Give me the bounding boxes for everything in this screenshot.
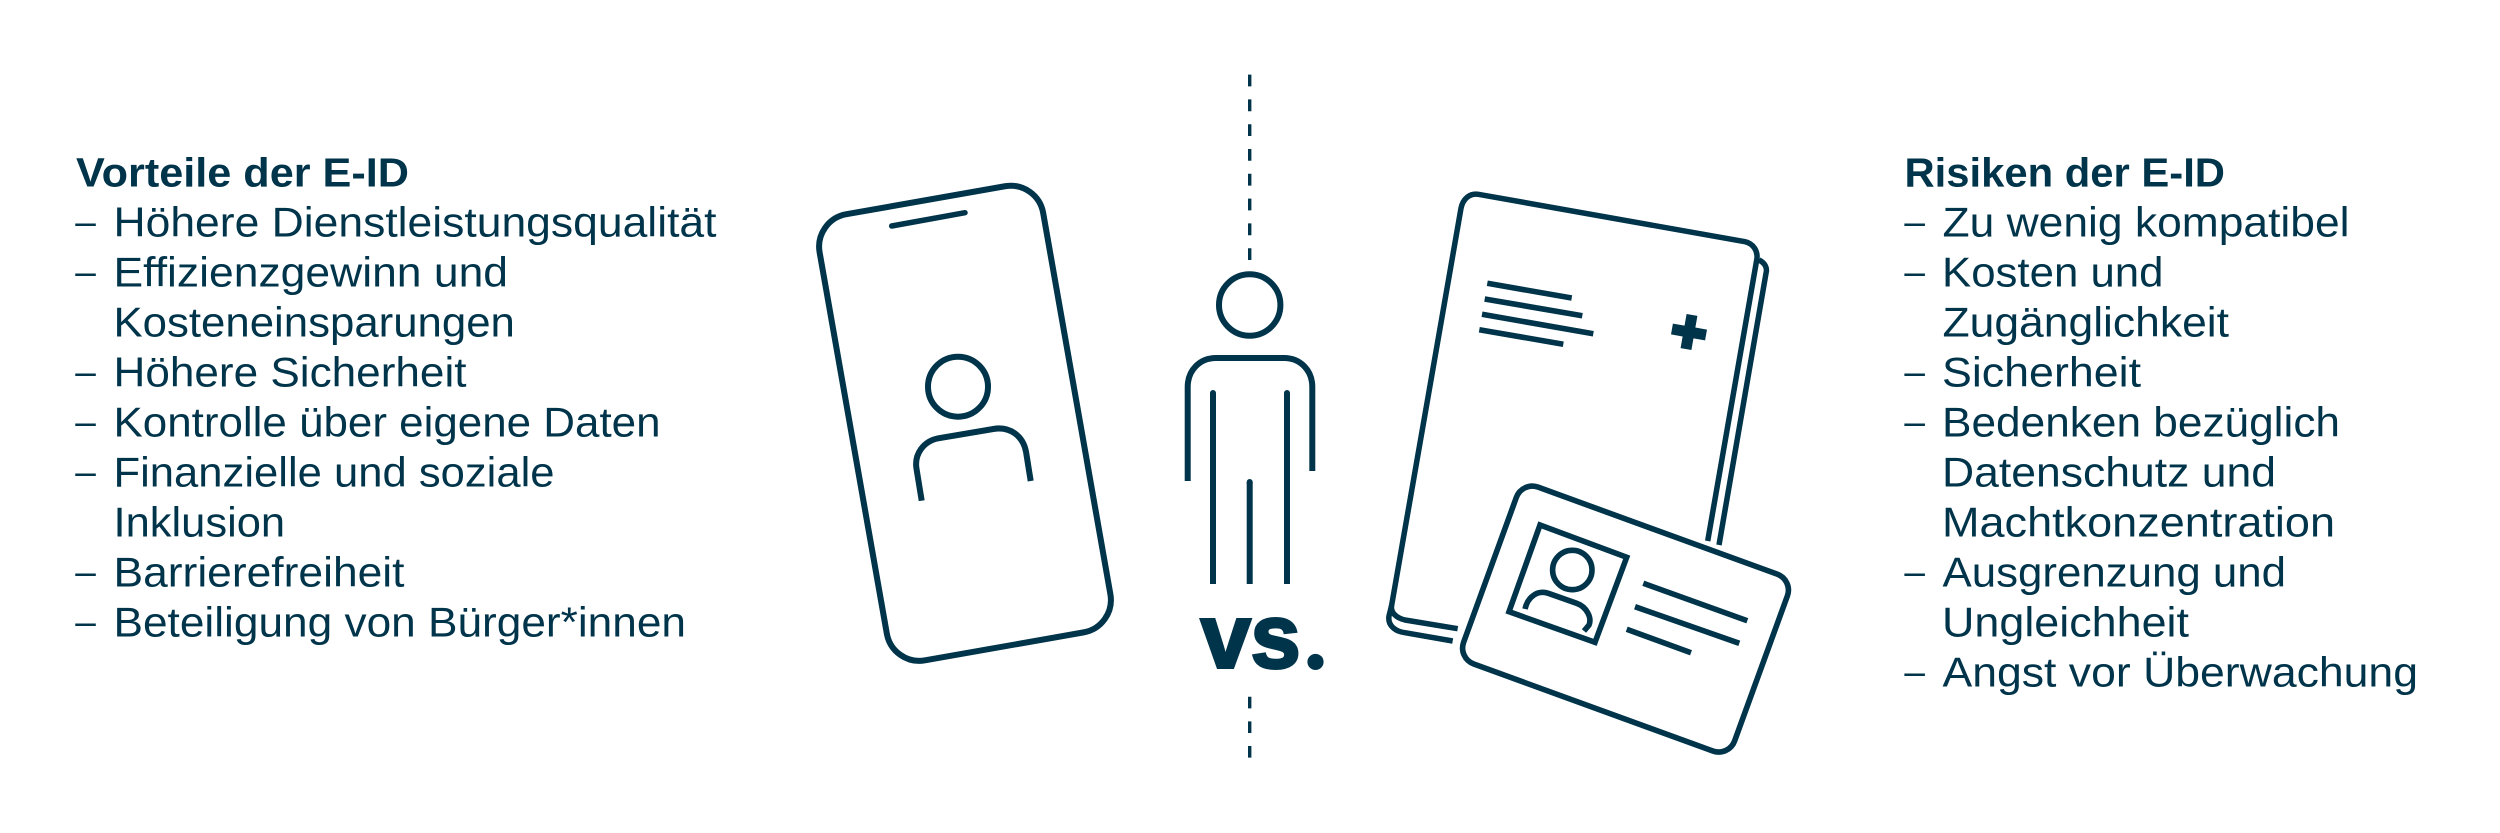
- list: Risiken: Zugänglichkeit: [1942, 299, 2229, 346]
- list: Vorteile: Barrierefreiheit: [114, 549, 405, 596]
- list: Vorteile: Höhere Dienstleistungsqualität: [114, 199, 717, 246]
- icon: person: [1188, 274, 1312, 584]
- booklet back cover: [1389, 260, 1766, 641]
- divider: dashed line top: [1248, 75, 1251, 261]
- list: Risiken: Ausgrenzung und: [1942, 549, 2286, 596]
- label: vs.: vs: [1201, 587, 1301, 688]
- list: Vorteile: –: [75, 251, 96, 292]
- list: Vorteile: Effizienzgewinn und: [114, 249, 508, 296]
- list: Vorteile: Höhere Sicherheit: [114, 349, 467, 396]
- list: Vorteile: –: [75, 351, 96, 392]
- list: Risiken: Sicherheit: [1942, 349, 2141, 396]
- icon: health insurance booklet: [1389, 194, 1766, 641]
- list: Vorteile: Finanzielle und soziale: [114, 449, 554, 496]
- list: Risiken: Ungleichheit: [1942, 599, 2189, 646]
- booklet cross: [1669, 312, 1709, 352]
- booklet front cover: [1391, 194, 1757, 629]
- list: Vorteile: –: [75, 601, 96, 642]
- list: Vorteile: Kontrolle über eigene Daten: [114, 399, 660, 446]
- list: Risiken: Angst vor Überwachung: [1942, 649, 2418, 696]
- panel: Risiken der E-ID: [1904, 150, 2418, 696]
- card text lines: [1627, 583, 1747, 653]
- list: Vorteile: Beteiligung von Bürger*innen: [114, 599, 686, 646]
- list: Risiken: –: [1904, 351, 1925, 392]
- card photo frame: [1509, 525, 1627, 642]
- list: Vorteile: Kosteneinsparungen: [114, 299, 515, 346]
- booklet text lines: [1479, 283, 1593, 344]
- list: Risiken: [1904, 199, 2418, 696]
- list: Risiken: –: [1904, 401, 1925, 442]
- card portrait: [1525, 550, 1592, 631]
- list: Risiken: –: [1904, 251, 1925, 292]
- icon: smartphone with user: [814, 181, 1116, 666]
- list: Risiken: Kosten und: [1942, 249, 2164, 296]
- list: Risiken: –: [1904, 651, 1925, 692]
- list: Risiken: –: [1904, 201, 1925, 242]
- list: Vorteile: –: [75, 451, 96, 492]
- label: vs.: .: [1303, 580, 1328, 690]
- heading: Vorteile: Vorteile der E-ID: [76, 150, 409, 196]
- list: Vorteile: –: [75, 401, 96, 442]
- list: Vorteile: [75, 199, 717, 646]
- divider: dashed line bottom: [1248, 697, 1251, 759]
- list: Vorteile: –: [75, 201, 96, 242]
- list: Risiken: –: [1904, 551, 1925, 592]
- list: Risiken: Zu wenig kompatibel: [1942, 199, 2350, 246]
- list: Vorteile: Inklusion: [114, 499, 285, 546]
- list: Risiken: Machtkonzentration: [1942, 499, 2335, 546]
- heading: Risiken: Risiken der E-ID: [1904, 150, 2225, 196]
- icon: ID card: [1458, 481, 1793, 757]
- list: Risiken: Datenschutz und: [1942, 449, 2276, 496]
- panel: Vorteile der E-ID: [75, 150, 717, 646]
- list: Vorteile: –: [75, 551, 96, 592]
- list: Risiken: Bedenken bezüglich: [1942, 399, 2340, 446]
